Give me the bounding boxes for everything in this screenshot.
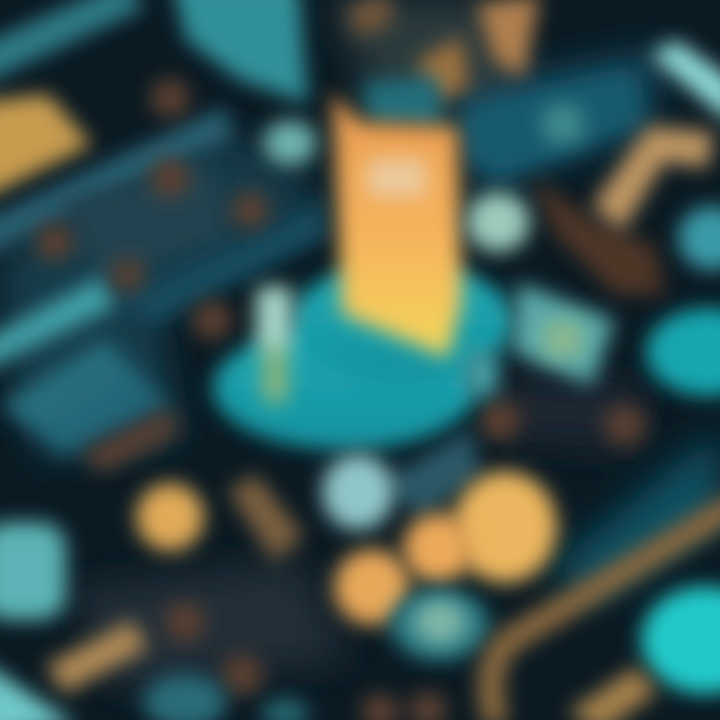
dark block under cloud	[382, 428, 480, 518]
left teal panel	[0, 340, 170, 455]
top-centre teal shape	[172, 0, 308, 104]
teal card with square	[512, 282, 615, 386]
right bright teal blob lower	[641, 586, 720, 694]
right tan arrow shape	[592, 126, 714, 232]
right teal blob middle	[646, 308, 720, 396]
brown coin stack	[228, 474, 304, 562]
left light teal bar	[0, 276, 116, 372]
small pale square top right	[543, 105, 583, 143]
gold coin lower	[334, 549, 410, 625]
tan pill	[46, 620, 148, 694]
teal block behind orange bar	[362, 76, 444, 128]
pale sliver by cloud	[466, 352, 498, 396]
pale label on orange bar	[366, 158, 428, 198]
pale column on cloud	[256, 286, 292, 403]
teal coin highlight	[414, 600, 466, 644]
lower diagonal band	[125, 200, 328, 325]
pale coin	[322, 454, 394, 530]
bottom tan pill	[568, 666, 658, 720]
bottom-left pale teal blob	[0, 522, 66, 620]
dark blue block	[60, 165, 228, 280]
upper left diagonal band	[0, 106, 233, 258]
bottom teal blob	[143, 674, 227, 720]
upper right teal panel	[462, 72, 642, 178]
bottom small teal blob	[261, 698, 309, 720]
top orange accents	[346, 0, 540, 104]
brown dots	[36, 78, 665, 720]
card centre	[543, 320, 583, 358]
right teal blob upper	[678, 206, 720, 270]
gold coin left	[136, 483, 204, 551]
main teal cloud	[213, 262, 514, 450]
top-right pale bar	[650, 40, 720, 126]
top-left teal band	[0, 0, 145, 85]
bronze curved pipe	[491, 505, 720, 720]
teal coin lower	[390, 589, 490, 661]
main orange bar	[332, 92, 462, 358]
gold coin medium	[403, 513, 473, 583]
small pale circles	[263, 120, 530, 252]
gold bar left	[0, 94, 92, 200]
gold coin large	[453, 471, 557, 583]
bottom-left pale corner	[0, 660, 76, 720]
